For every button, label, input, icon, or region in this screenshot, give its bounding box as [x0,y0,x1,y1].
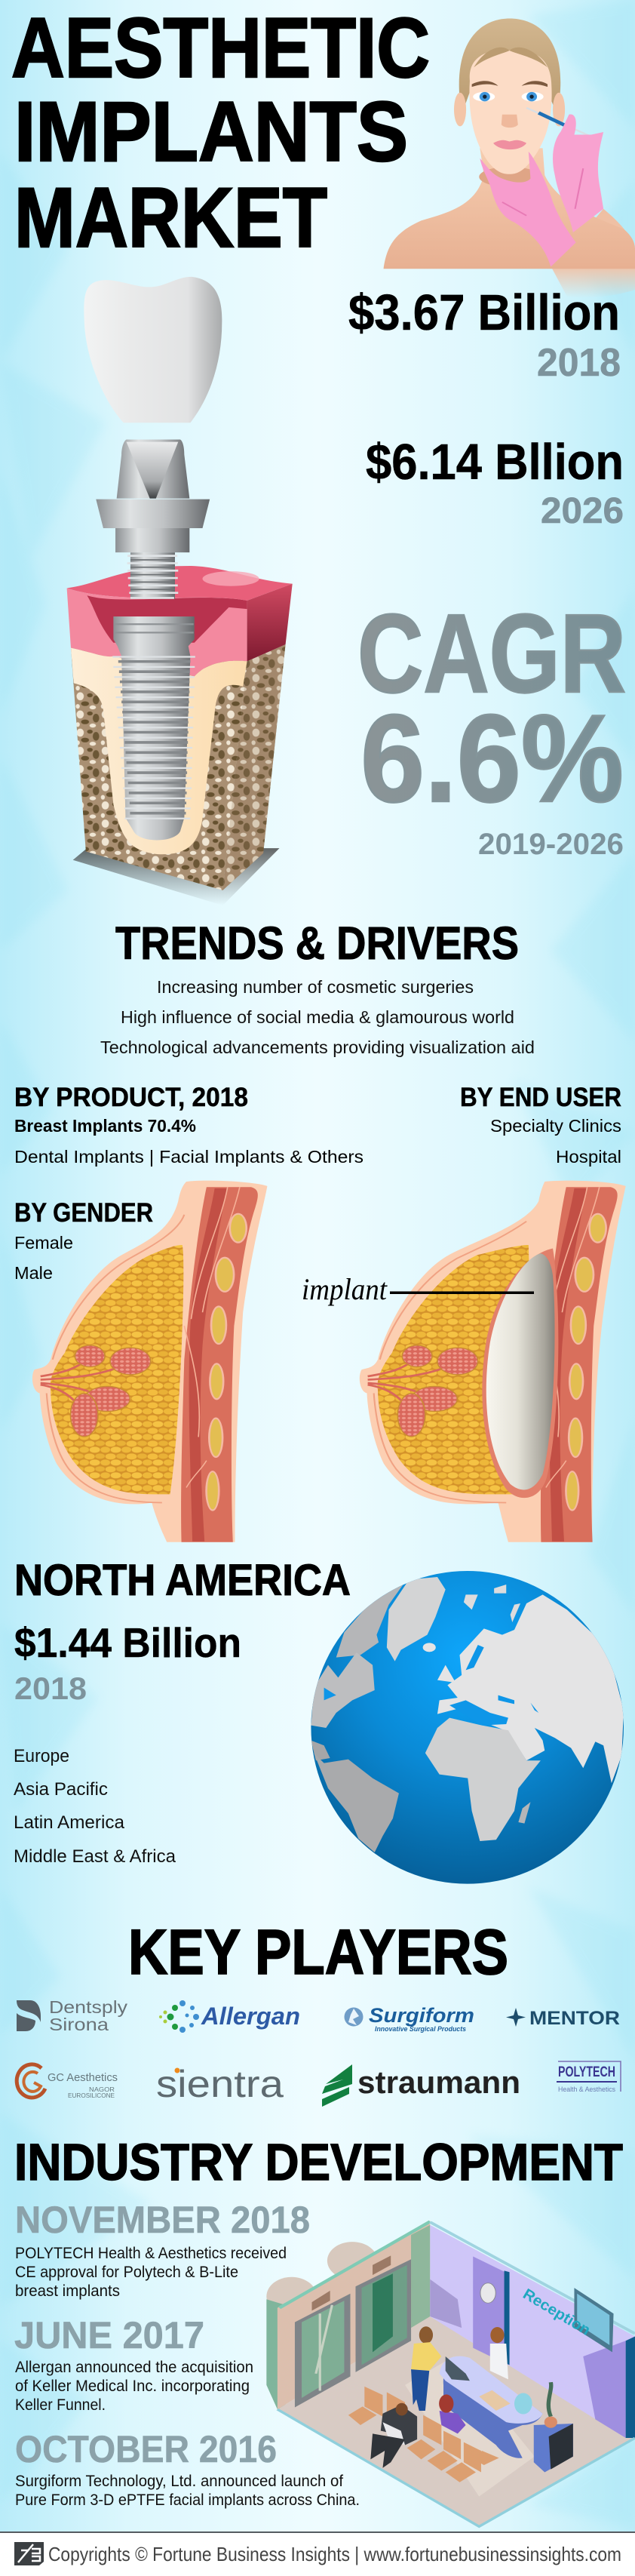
logo: Surgiform: Innovative Surgical Products [375,2025,466,2033]
text block: trends list [100,977,535,1057]
text block: other regions: Europe [14,1746,69,1766]
development: June 2017: Allergan announced the acquisition [15,2359,253,2376]
heading: key players: KEY PLAYERS [128,1917,508,1987]
development: November 2018: breast implants [15,2282,120,2300]
text block: other regions [14,1746,176,1867]
stat: 2018 market value: $3.67 Billion [348,284,620,341]
logo: Polytech: Health & Aesthetics [558,2086,615,2093]
panel: by end user [460,1083,621,1167]
stat: 2018 market value: 2018 [537,341,621,385]
heading: trends and drivers: TRENDS & DRIVERS [115,918,519,969]
panel: by gender: Male [14,1263,53,1283]
panel: by end user: BY END USER [460,1083,621,1112]
text block: trends list: High influence of social media & glamourous world [121,1007,514,1027]
title: MARKET [14,171,327,265]
development: June 2017: JUNE 2017 [14,2314,204,2356]
panel: north america: NORTH AMERICA [14,1556,351,1605]
development: November 2018: NOVEMBER 2018 [15,2199,310,2241]
label: implant: implant [302,1272,388,1306]
logo: Allergan: Allergan [201,2003,300,2030]
development: October 2016 [15,2428,360,2509]
logo: Polytech: POLYTECH [558,2064,615,2080]
logo: Dentsply Sirona: Sirona [49,2015,109,2034]
logo: Dentsply Sirona [17,1997,128,2034]
stat: CAGR [357,592,626,861]
logo: straumann [322,2064,520,2107]
logo: GC Aesthetics [17,2064,118,2099]
illustration: reception room: Reception [520,2286,593,2339]
illustration: globe [311,1571,624,1884]
stat: 2018 market value [348,284,621,385]
logo: Mentor: MENTOR [529,2008,620,2029]
footer [0,2531,635,2576]
development: June 2017 [14,2314,253,2414]
logo: Allergan [159,2000,300,2033]
development: June 2017: of Keller Medical Inc. incorporating [15,2378,250,2395]
development: October 2016: OCTOBER 2016 [15,2428,277,2470]
panel: by product: Breast Implants 70.4% [14,1116,196,1136]
stat: CAGR: 2019-2026 [478,828,624,861]
illustration: dental implant [67,277,293,905]
panel: north america: $1.44 Billion [14,1619,241,1666]
logo: GC Aesthetics: GC Aesthetics [48,2071,118,2084]
development: October 2016: Pure Form 3-D ePTFE facial implants across China. [15,2491,360,2509]
text block: other regions: Asia Pacific [14,1779,108,1800]
illustration: natural breast anatomy [32,1181,267,1542]
panel: by end user: Hospital [556,1147,621,1167]
text block: other regions: Middle East & Africa [14,1846,176,1867]
development: November 2018: CE approval for Polytech & B-Lite [15,2264,238,2281]
text block: other regions: Latin America [14,1812,125,1833]
logo: Surgiform: Surgiform [369,2004,474,2027]
illustration: reception room [266,2221,635,2526]
logo: Surgiform [344,2004,474,2033]
logo: straumann: straumann [357,2064,520,2100]
development: October 2016: Surgiform Technology, Ltd. announced launch of [15,2473,343,2490]
title: IMPLANTS [14,85,408,179]
logo: Polytech [557,2061,621,2093]
title: AESTHETIC [11,1,430,95]
stat: 2026 market value: 2026 [541,491,624,531]
logo: Dentsply Sirona: Dentsply [49,1997,128,2017]
illustration: woman receiving injection [384,19,635,298]
panel: by gender: BY GENDER [14,1198,153,1228]
development: June 2017: Keller Funnel. [15,2396,106,2414]
stat: 2026 market value [366,434,624,531]
logo: sientra: sientra [156,2063,284,2105]
label: implant [302,1272,534,1306]
text block: trends list: Technological advancements providing visualization aid [100,1037,535,1057]
panel: north america: 2018 [14,1671,87,1706]
panel: by end user: Specialty Clinics [490,1116,621,1136]
panel: by product [14,1083,364,1167]
development: November 2018: POLYTECH Health & Aesthetics received [15,2245,287,2262]
illustration: breast with implant [360,1181,626,1542]
text block: trends list: Increasing number of cosmetic surgeries [157,977,474,997]
title [11,1,430,265]
logo: GC Aesthetics: EUROSILICONE [68,2092,115,2099]
development: November 2018 [15,2199,310,2300]
logo: GC Aesthetics: NAGOR [89,2086,115,2093]
panel: by gender [14,1198,153,1283]
panel: by gender: Female [14,1233,73,1253]
panel: by product: BY PRODUCT, 2018 [14,1083,248,1112]
panel: by product: Dental Implants | Facial Implants & Others [14,1147,364,1167]
panel: north america [14,1556,351,1706]
